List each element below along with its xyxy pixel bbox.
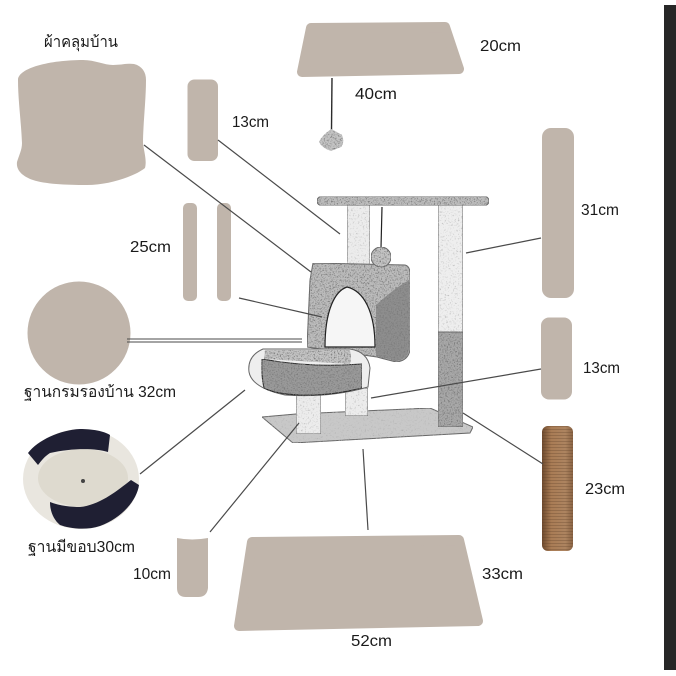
label: 10cm: 10cm	[133, 566, 171, 583]
photo: bed inner cushion	[38, 449, 128, 507]
label: 33cm: 33cm	[482, 566, 523, 583]
support post front	[296, 394, 321, 434]
panel: 10cm short post part	[133, 538, 208, 597]
shape: right strip	[217, 203, 231, 301]
line: base board	[363, 449, 368, 530]
panel: rimmed bed photo	[23, 429, 139, 556]
right post dark section	[438, 332, 463, 427]
texture: rope windings	[542, 426, 573, 551]
label: round base 32cm: ฐานกรมรองบ้าน 32cm	[24, 384, 176, 401]
panel: 13cm upper post part	[188, 80, 269, 161]
bed front dark	[262, 359, 362, 395]
label: rimmed base 30cm: ฐานมีขอบ30cm	[28, 538, 135, 556]
panel: house cover part	[17, 34, 146, 185]
panel: 13cm lower post part	[541, 318, 620, 400]
photo: centre hole	[81, 479, 85, 483]
ball	[371, 247, 391, 267]
diagram: assembled cat tree	[249, 196, 489, 443]
ball string	[381, 207, 382, 248]
line: round base to house	[127, 339, 302, 342]
support post rear	[345, 388, 368, 416]
label: 13cm: 13cm	[583, 360, 620, 377]
base platform	[262, 408, 473, 443]
shape: house cover	[17, 60, 146, 185]
shape: tall post	[542, 128, 574, 298]
house arch opening	[325, 287, 375, 347]
line: cover to house	[144, 145, 311, 272]
panel: 31cm tall post part	[542, 128, 619, 298]
photo: dark top rim	[28, 429, 110, 465]
shape: sisal post	[542, 426, 573, 551]
label: house cover: ผ้าคลุมบ้าน	[44, 34, 118, 52]
panel: 25cm pair of posts	[130, 203, 231, 301]
shape: top platform	[302, 27, 459, 72]
line: lower post	[371, 369, 541, 398]
label: 23cm: 23cm	[585, 481, 625, 498]
shape: lower post	[541, 318, 572, 400]
house body	[307, 263, 410, 362]
panel: round base part	[24, 282, 176, 401]
shape: base board	[239, 540, 478, 626]
line: 13cm to upper post	[218, 140, 340, 234]
label: 25cm: 25cm	[130, 239, 171, 256]
photo: bed body	[23, 429, 139, 529]
upper post	[347, 205, 370, 265]
bed inner top	[264, 350, 351, 364]
shape: round base	[28, 282, 130, 384]
panel: base board part	[239, 540, 523, 650]
label: 13cm: 13cm	[232, 114, 269, 131]
dark right edge bar	[664, 5, 676, 670]
panel: top platform part	[302, 27, 521, 151]
right post light section	[438, 205, 463, 332]
line: tall post	[466, 238, 541, 253]
bed rim	[249, 349, 370, 396]
line: short post	[210, 423, 299, 532]
label: 40cm: 40cm	[355, 86, 397, 103]
top platform	[317, 196, 489, 206]
line: rope post	[463, 413, 543, 464]
panel: sisal rope post	[542, 426, 625, 551]
shape: short post	[177, 538, 208, 597]
label: 52cm: 52cm	[351, 633, 392, 650]
shape: left strip	[183, 203, 197, 301]
line: strips to house	[239, 298, 322, 317]
label: 31cm: 31cm	[581, 202, 619, 219]
connector lines	[127, 140, 543, 532]
line: rimmed bed	[140, 390, 245, 474]
icon: hanging ball	[319, 129, 343, 151]
label: 20cm: 20cm	[480, 38, 521, 55]
house dark side	[376, 280, 409, 361]
photo: dark bottom rim	[50, 480, 139, 529]
shape: upper post	[188, 80, 218, 161]
icon: hanging ball string	[330, 78, 333, 130]
